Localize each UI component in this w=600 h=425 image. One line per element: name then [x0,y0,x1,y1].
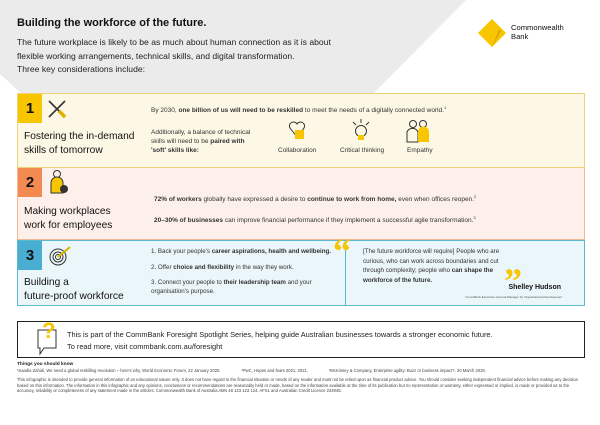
heading 1 [24,131,134,156]
action list: 2. Offer choice and flexibility in the way they work. [151,264,294,270]
icon: critical thinking [340,119,384,154]
callout text [67,330,493,350]
number 3 [18,241,42,270]
panel 3: future-proof [17,240,585,306]
footnotes: This infographic is intended to provide general information of an educational nature only. It does not have regard to the financial situation or needs of any reader and must not be relied upon as financial product advice. You should consider seeking independent financial advice before making any decision based on this information. The information in this infographic and any opinions, conclusions or recommendations are reasonably held or made, based on the information available at the time of its publication but no representation or warranty, either expressed or implied, is made or provided as to the accuracy, reliability or completeness of any statement made in the articles. Commonwealth Bank of Australia ABN 48 123 123 124. AFSL and Australian Credit Licence 234945. [17,377,578,393]
quote: ” [504,261,522,301]
logo: Commonwealth Bank: Commonwealth [511,23,564,32]
quote: [The future workforce will require] People who are curious, who can work across boundaries and cut through complexity; people who can shape the workforce of the future. [363,248,499,284]
footnotes [17,362,578,393]
number 3: 3 [26,247,34,264]
icon: empathy: Empathy [407,147,433,154]
intro text: flexible working arrangements, technical skills, and digital transformation. [17,50,295,60]
footnotes: Things you should know [17,362,73,367]
logo: Commonwealth Bank: Bank [511,32,528,40]
panel 2: workplaces: 20–30% of businesses can improve financial performance if they implement a successful agile transformation.3 [154,215,476,224]
footnotes: ¹Saadia Zahidi, We need a global reskilling revolution – here's why, World Economic Forum, 22 January 2020. ²PwC, Hopes and fears 2021, 2021. ³McKinsey & Company, Enterprise agility: Buzz or business impact?, 20 March 2020. [17,368,486,373]
intro text: The future workplace is likely to be as much about human connection as it is about [17,37,331,47]
title: Building the workforce of the future. [17,17,206,29]
stat 1: By 2030, one billion of us will need to be reskilled to meet the needs of a digitally connected world.1 [151,105,446,114]
quote: Shelley Hudson [508,284,561,291]
number 1 [18,94,42,123]
number 2: 2 [26,174,34,191]
heading 3 [24,277,124,302]
callout text: To read more, visit commbank.com.au/foresight [67,342,222,350]
heading 3: future-proof workforce [24,290,124,302]
stats 2: 72% of workers globally have expressed a desire to continue to work from home, even when offices reopen.2 [154,194,476,203]
icon: target [50,246,71,266]
panel 2: workplaces [17,168,585,240]
icon: tools [48,100,66,118]
icon: question bubble: ? [42,318,55,343]
logo: Commonwealth Bank [478,19,564,47]
heading 2: Making workplaces [24,206,111,217]
icon: empathy [406,120,433,154]
background grey shape [0,0,466,93]
action list: 1. Back your people's career aspirations, health and wellbeing. [151,248,331,255]
quote [345,240,585,306]
icon: collaboration: Collaboration [278,147,316,154]
action list [151,248,331,294]
icon: person [50,170,68,194]
panel 1: skills [17,93,585,168]
number 2 [18,168,42,197]
heading 3: Building a [24,277,69,288]
intro text: Three key considerations include: [17,64,145,74]
heading 1: skills of tomorrow [24,144,103,156]
callout text: This is part of the CommBank Foresight Spotlight Series, helping guide Australian businesses towards a stronger economic future. [67,330,493,339]
panel 3: future-proof: “ [333,231,351,271]
heading 1: Fostering the in-demand [24,131,134,142]
heading 2 [24,206,112,230]
quote: CommBank Executive General Manager for Organisational Development [465,295,562,299]
number 1: 1 [26,100,34,117]
icon: collaboration [278,122,316,154]
callout: foresight series [17,321,585,358]
intro text [17,37,331,74]
heading 2: work for employees [24,220,112,230]
action list: 3. Connect your people to their leadership team and your organisation's purpose. [151,279,312,294]
icon: question bubble [38,318,56,356]
icon: critical thinking: Critical thinking [340,147,384,154]
soft skills text: Additionally, a balance of technical skills will need to be paired with 'soft' skills like: [151,129,250,154]
